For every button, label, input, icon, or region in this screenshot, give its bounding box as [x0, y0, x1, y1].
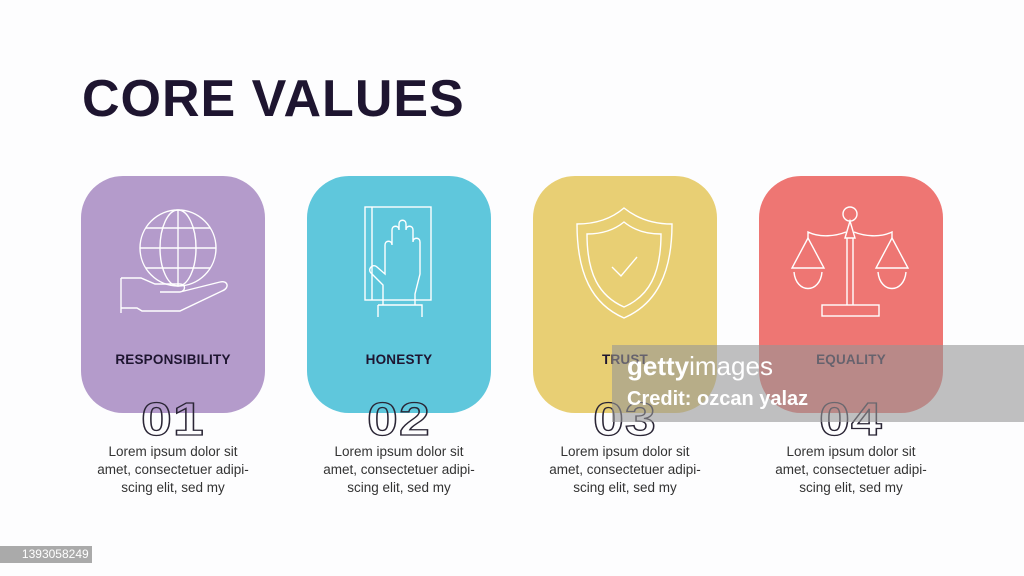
- text 3: scing elit, sed my: [573, 480, 677, 495]
- text 2: [323, 444, 475, 495]
- text 3: amet, consectetuer adipi-: [549, 462, 701, 477]
- text 1: [97, 444, 249, 495]
- text 4: [775, 444, 927, 495]
- icon: shield: [576, 207, 673, 319]
- text 2: amet, consectetuer adipi-: [323, 462, 475, 477]
- text 2: Lorem ipsum dolor sit: [334, 444, 464, 459]
- panel: trust: [533, 176, 717, 413]
- title: CORE VALUES: [82, 70, 465, 128]
- text 4: Lorem ipsum dolor sit: [786, 444, 916, 459]
- text 4: scing elit, sed my: [799, 480, 903, 495]
- text 1: amet, consectetuer adipi-: [97, 462, 249, 477]
- text 2: scing elit, sed my: [347, 480, 451, 495]
- panel: responsibility: [81, 176, 265, 413]
- icon: globe in hand: [120, 209, 228, 313]
- text 3: Lorem ipsum dolor sit: [560, 444, 690, 459]
- label: TRUST: [602, 352, 648, 367]
- icon: scales: [790, 206, 910, 317]
- text 1: scing elit, sed my: [121, 480, 225, 495]
- watermark band: [612, 345, 1024, 422]
- panel: equality: [759, 176, 943, 413]
- text 4: amet, consectetuer adipi-: [775, 462, 927, 477]
- label: EQUALITY: [816, 352, 886, 367]
- label: RESPONSIBILITY: [115, 352, 231, 367]
- panel: honesty: [307, 176, 491, 413]
- label: HONESTY: [366, 352, 432, 367]
- watermark text: Credit: ozcan yalaz: [627, 388, 808, 410]
- watermark text: [627, 351, 808, 410]
- image id: 1393058249: [22, 547, 89, 561]
- icon: hand on book: [364, 206, 432, 317]
- text 3: [549, 444, 701, 495]
- watermark text: gettyimages: [627, 351, 773, 381]
- image id: [0, 546, 92, 563]
- text 1: Lorem ipsum dolor sit: [108, 444, 238, 459]
